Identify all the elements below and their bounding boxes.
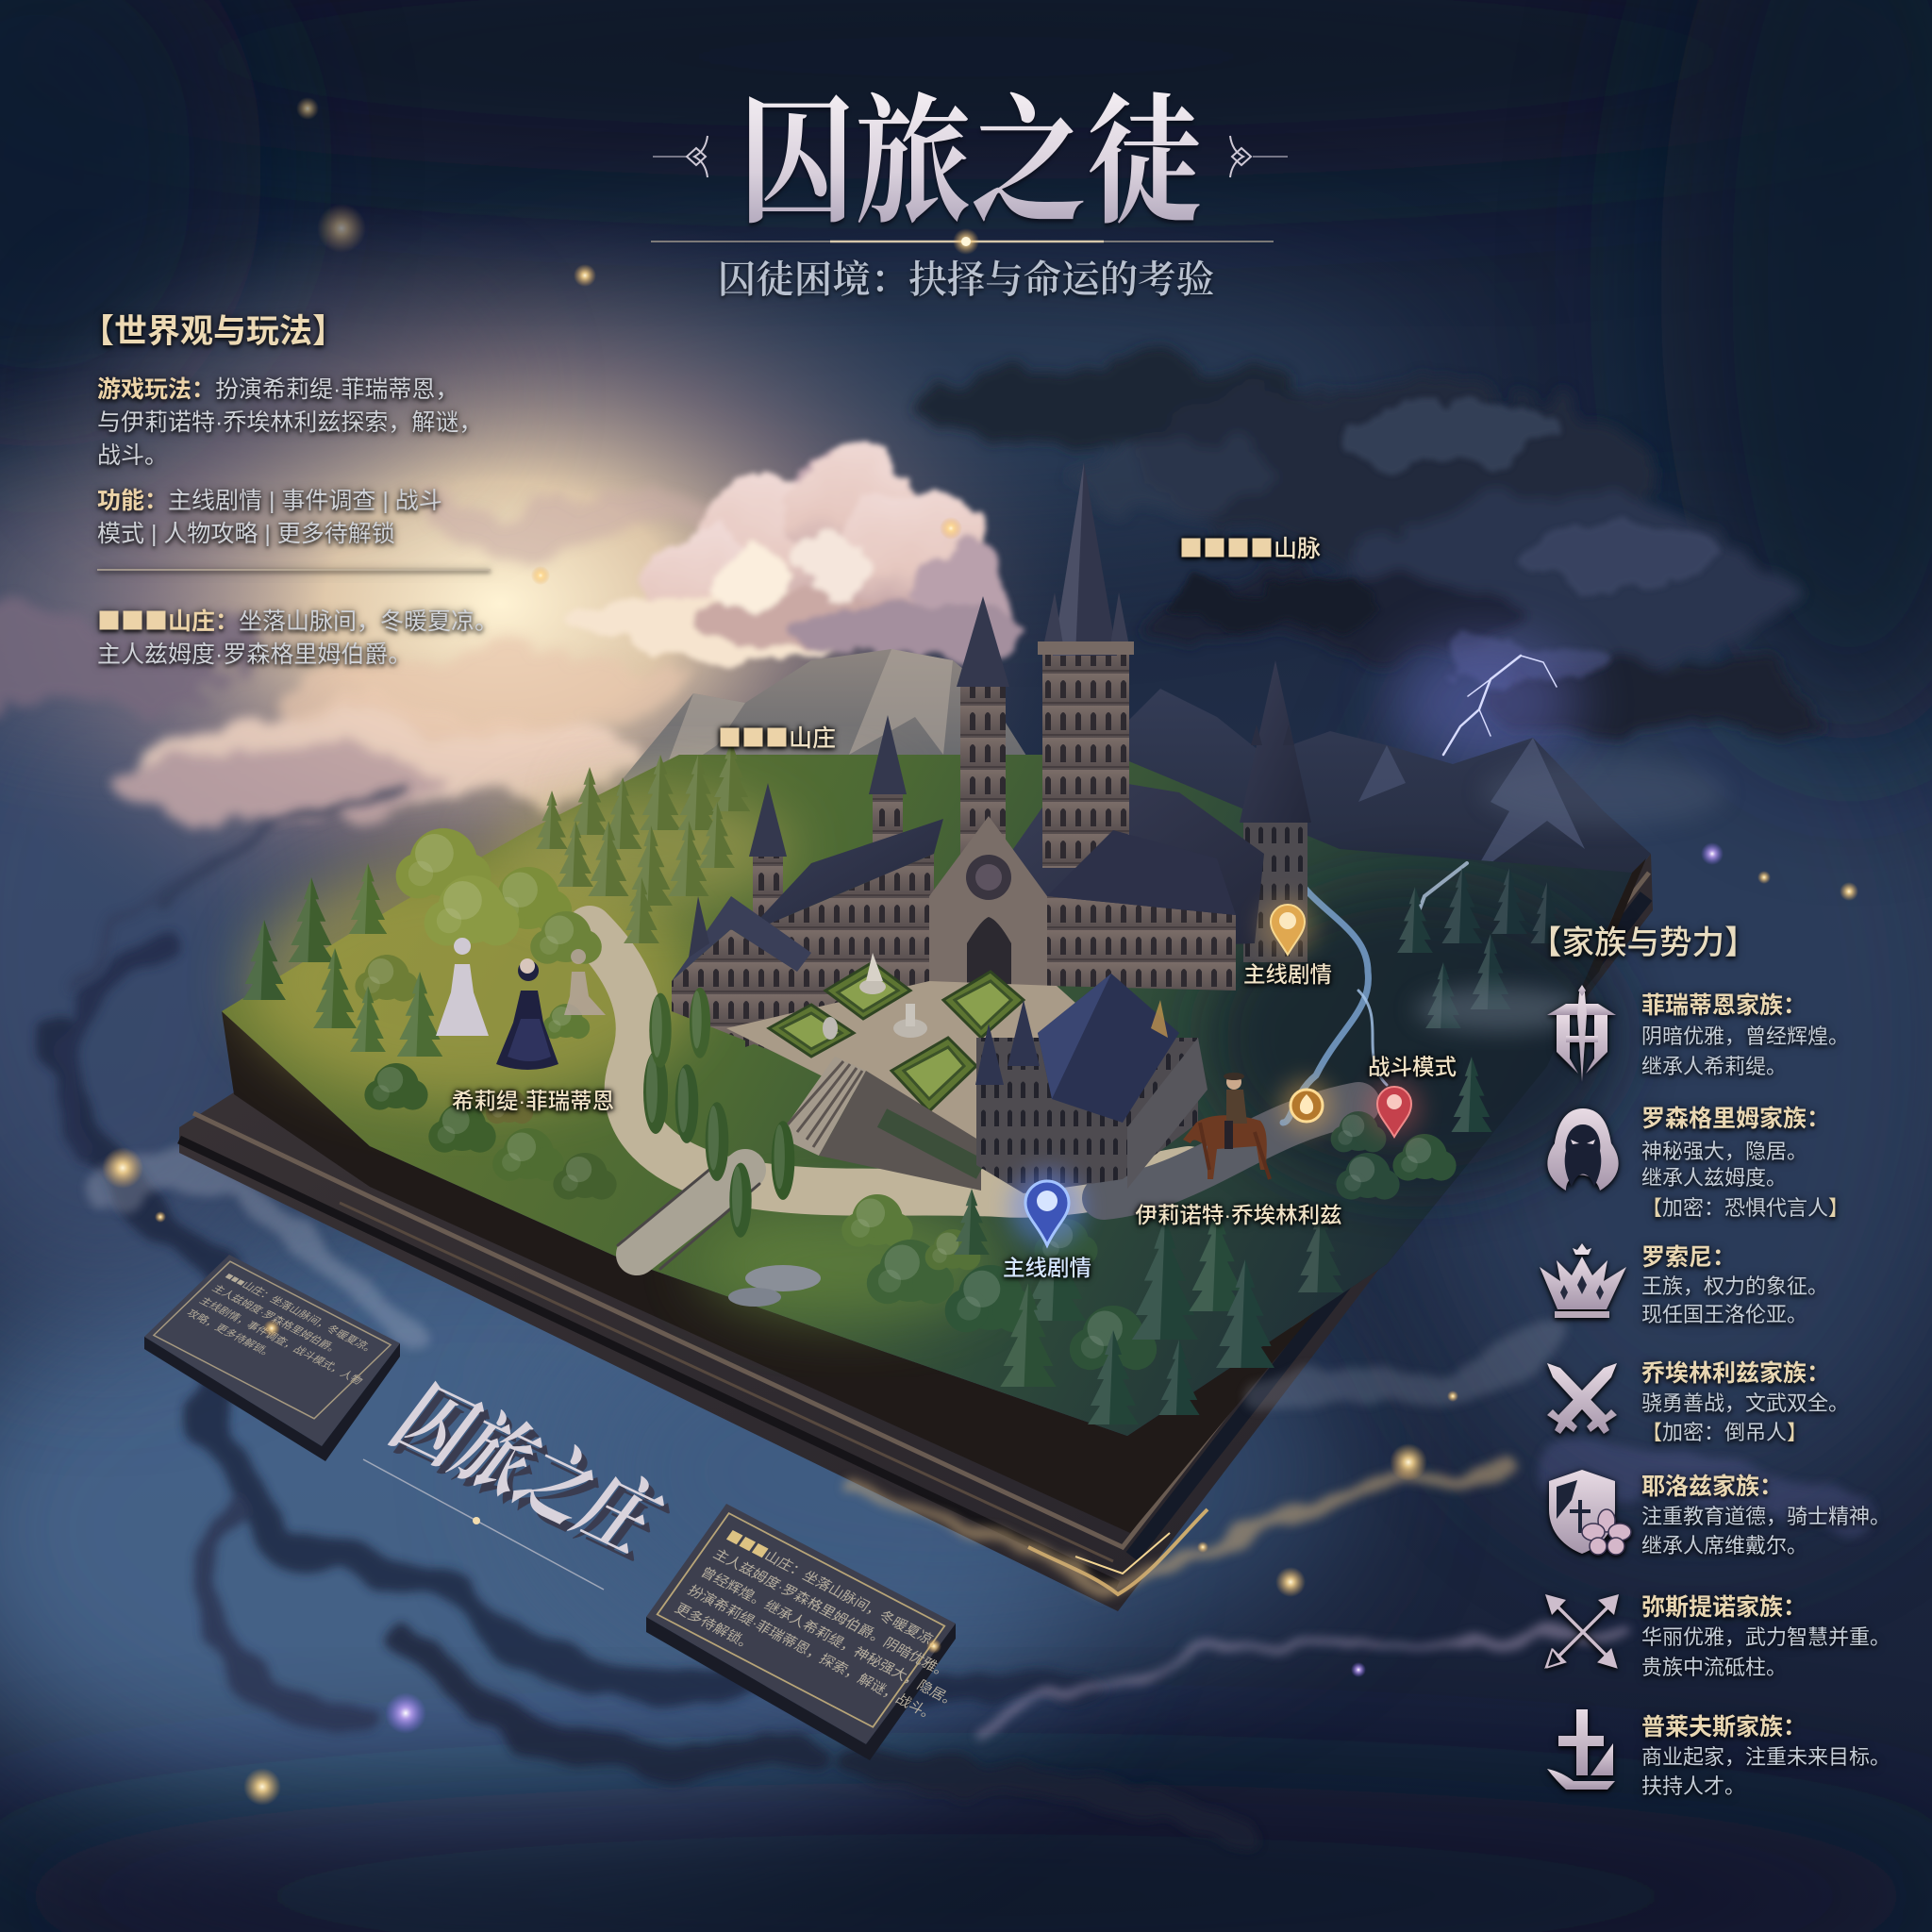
right mountain forest: [1331, 758, 1726, 1181]
character: pale lady left: [436, 938, 489, 1036]
text: Pleiades: 商业起家，注重未来目标。: [1641, 1745, 1890, 1769]
text: Rosengrim: 神秘强大，隐居。: [1641, 1140, 1807, 1163]
plaque: left: 主人兹姆度·罗森格里姆伯爵。: [209, 1282, 344, 1357]
text: Eyrinlitz: 骁勇善战，文武双全。: [1641, 1391, 1849, 1415]
text: Eyrinlitz: 【加密：倒吊人】: [1641, 1421, 1807, 1444]
plaque: right: 曾经辉煌。继承人希莉缇，神秘强大，隐居。: [697, 1565, 961, 1710]
front forest: [728, 1153, 1400, 1424]
castle: main tower and spire: [1038, 462, 1134, 868]
pin: blue main story: [1009, 1170, 1085, 1245]
smoke wisps: [38, 783, 1236, 1821]
text: Rossini: [1641, 1244, 1828, 1326]
icon: shield and orchid: [1549, 1470, 1631, 1555]
golden mist: [849, 1340, 1849, 1736]
label: Cilia: 希莉缇·菲瑞蒂恩: [452, 1089, 614, 1113]
character: Cilia in dark dress: [496, 958, 558, 1070]
subtitle: 囚徒困境：抉择与命运的考验: [718, 258, 1214, 301]
castle: central roofs: [1000, 774, 1264, 953]
diorama: ground surface: [222, 755, 1632, 1436]
plaque: right: ■■■山庄：坐落山脉间，冬暖夏凉。: [723, 1526, 950, 1655]
family: Pleiades: [1547, 1709, 1890, 1798]
text: Mistino: 华丽优雅，武力智慧并重。: [1641, 1625, 1890, 1649]
text block: functions: 模式 | 人物攻略 | 更多待解锁: [97, 521, 395, 547]
clouds: warm sunlit: [0, 447, 1019, 821]
diorama: soil cliff: [222, 858, 1646, 1533]
icon: crossed arrows: [1545, 1594, 1619, 1668]
heading: families: 【家族与势力】: [1529, 925, 1757, 961]
floor title: 囚旅之庄: 囚旅之庄: [375, 1374, 677, 1569]
text: Ferretti: [1641, 992, 1849, 1078]
text: Mistino: 贵族中流砥柱。: [1641, 1656, 1787, 1679]
icon: flame marker: [1280, 1079, 1333, 1132]
family: Ferretti: [1547, 985, 1849, 1082]
label: manor: ■■■山庄: [718, 720, 836, 754]
clouds: storm: [906, 366, 1821, 769]
characters: three ladies: [436, 938, 606, 1070]
family: Yelloz: [1549, 1470, 1890, 1557]
icon: ship and cross: [1547, 1709, 1615, 1790]
icon: crossed swords: [1547, 1363, 1617, 1434]
text: Yelloz: 耶洛兹家族：: [1641, 1474, 1783, 1500]
label: mountains: ■■■■山脉: [1179, 530, 1321, 564]
text block: gameplay: [97, 376, 482, 469]
label: main story upper: 主线剧情: [1243, 962, 1332, 987]
text: Ferretti: 继承人希莉缇。: [1641, 1055, 1787, 1078]
title ornament left: [653, 136, 708, 177]
icon: crown: [1540, 1243, 1626, 1318]
family: Rossini: [1540, 1243, 1828, 1326]
text block: functions: 功能：主线剧情 | 事件调查 | 战斗: [97, 488, 442, 514]
castle: [672, 462, 1311, 1193]
castle: front hall: [975, 974, 1208, 1193]
text: Pleiades: 扶持人才。: [1641, 1774, 1745, 1798]
castle: rear right tower: [1240, 660, 1311, 962]
text block: gameplay: 与伊莉诺特·乔埃林利兹探索，解谜，: [97, 409, 482, 436]
text block: gameplay: 游戏玩法：扮演希莉缇·菲瑞蒂恩，: [97, 376, 458, 403]
heading: world and gameplay: 【世界观与玩法】: [81, 313, 345, 350]
plaque: right: 更多待解锁。: [672, 1601, 758, 1654]
text: Mistino: [1641, 1594, 1890, 1679]
pin: red combat: [1366, 1080, 1423, 1137]
back forest: [536, 741, 750, 943]
label: main story lower: 主线剧情: [1003, 1256, 1091, 1280]
panel: families and factions: [1529, 925, 1890, 1798]
character: rider on horse: [1183, 1073, 1270, 1179]
castle: fountain and statue: [823, 953, 927, 1040]
text block: manor: 主人兹姆度·罗森格里姆伯爵。: [97, 641, 411, 668]
diorama: base slab: [179, 854, 1653, 1611]
text: Rossini: 罗索尼：: [1641, 1244, 1736, 1271]
family: Mistino: [1545, 1594, 1890, 1679]
castle: grand staircase: [778, 1057, 981, 1191]
text: Rosengrim: 继承人兹姆度。: [1641, 1166, 1787, 1190]
text: Eyrinlitz: [1641, 1360, 1849, 1444]
floor title divider: [363, 1459, 604, 1590]
castle: courtyard: [726, 981, 1104, 1160]
plaque: right: 主人兹姆度·罗森格里姆伯爵。阴暗优雅。: [710, 1546, 953, 1681]
title text: 囚旅之徒: [739, 87, 1203, 242]
title divider: [651, 228, 1274, 255]
text block: manor: ■■■山庄：坐落山脉间，冬暖夏凉。: [97, 603, 498, 637]
left grove: [242, 828, 794, 1238]
plaque: left: ■■■山庄：坐落山脉间，冬暖夏凉。: [222, 1270, 380, 1357]
icon: sword monogram: [1547, 985, 1616, 1082]
lightning: [1443, 656, 1557, 755]
icon: hood: [1547, 1108, 1619, 1191]
text: Rosengrim: 罗森格里姆家族：: [1641, 1106, 1830, 1132]
label: Eleanor: 伊莉诺特·乔埃林利兹: [1135, 1203, 1342, 1227]
castle: left towers: [749, 596, 1009, 939]
text: Pleiades: 普莱夫斯家族：: [1641, 1714, 1807, 1740]
plaque: right: [646, 1504, 993, 1760]
plaque: left: 攻略，更多待解锁。: [184, 1307, 278, 1360]
castle: garden hedges: [769, 962, 1024, 1111]
text: Yelloz: [1641, 1474, 1890, 1557]
river: [1283, 863, 1467, 1123]
castle: west wing: [672, 819, 943, 1061]
text: Rosengrim: 【加密：恐惧代言人】: [1641, 1196, 1849, 1220]
family: Rosengrim: [1547, 1106, 1849, 1220]
text: Rossini: 王族，权力的象征。: [1641, 1274, 1828, 1298]
text: Eyrinlitz: 乔埃林利兹家族：: [1641, 1360, 1830, 1387]
family: Eyrinlitz: [1547, 1360, 1849, 1444]
plaque: left: [144, 1255, 400, 1461]
label: combat mode: 战斗模式: [1368, 1055, 1457, 1079]
title ornament right: [1230, 136, 1288, 177]
text block: gameplay: 战斗。: [97, 442, 168, 469]
panel: world and gameplay: [81, 313, 498, 668]
text: Ferretti: 菲瑞蒂恩家族：: [1641, 992, 1807, 1019]
text: Pleiades: [1641, 1714, 1890, 1798]
floor title: 囚旅之庄: 囚旅之庄: [380, 1381, 683, 1576]
mountains: [575, 649, 1651, 1000]
text: Rossini: 现任国王洛伦亚。: [1641, 1303, 1807, 1326]
map labels: [452, 530, 1457, 1280]
text block: functions: [97, 488, 442, 547]
text: Rosengrim: [1641, 1106, 1849, 1220]
main title: [651, 87, 1288, 301]
text: Yelloz: 注重教育道德，骑士精神。: [1641, 1505, 1890, 1528]
text: Mistino: 弥斯提诺家族：: [1641, 1594, 1807, 1621]
castle: grand facade: [929, 816, 1236, 991]
text block: manor: [97, 603, 498, 668]
text: Ferretti: 阴暗优雅，曾经辉煌。: [1641, 1024, 1849, 1048]
text: Yelloz: 继承人席维戴尔。: [1641, 1534, 1807, 1557]
diorama: paths: [590, 929, 1358, 1269]
divider: [97, 569, 491, 571]
character: pale lady right: [564, 949, 606, 1015]
pin: yellow main story: [1259, 898, 1316, 955]
plaque: right: 扮演希莉缇·菲瑞蒂恩，探索，解谜，战斗。: [685, 1583, 940, 1724]
plaque: left: 主线剧情，事件调查，战斗模式，人物: [196, 1294, 366, 1387]
